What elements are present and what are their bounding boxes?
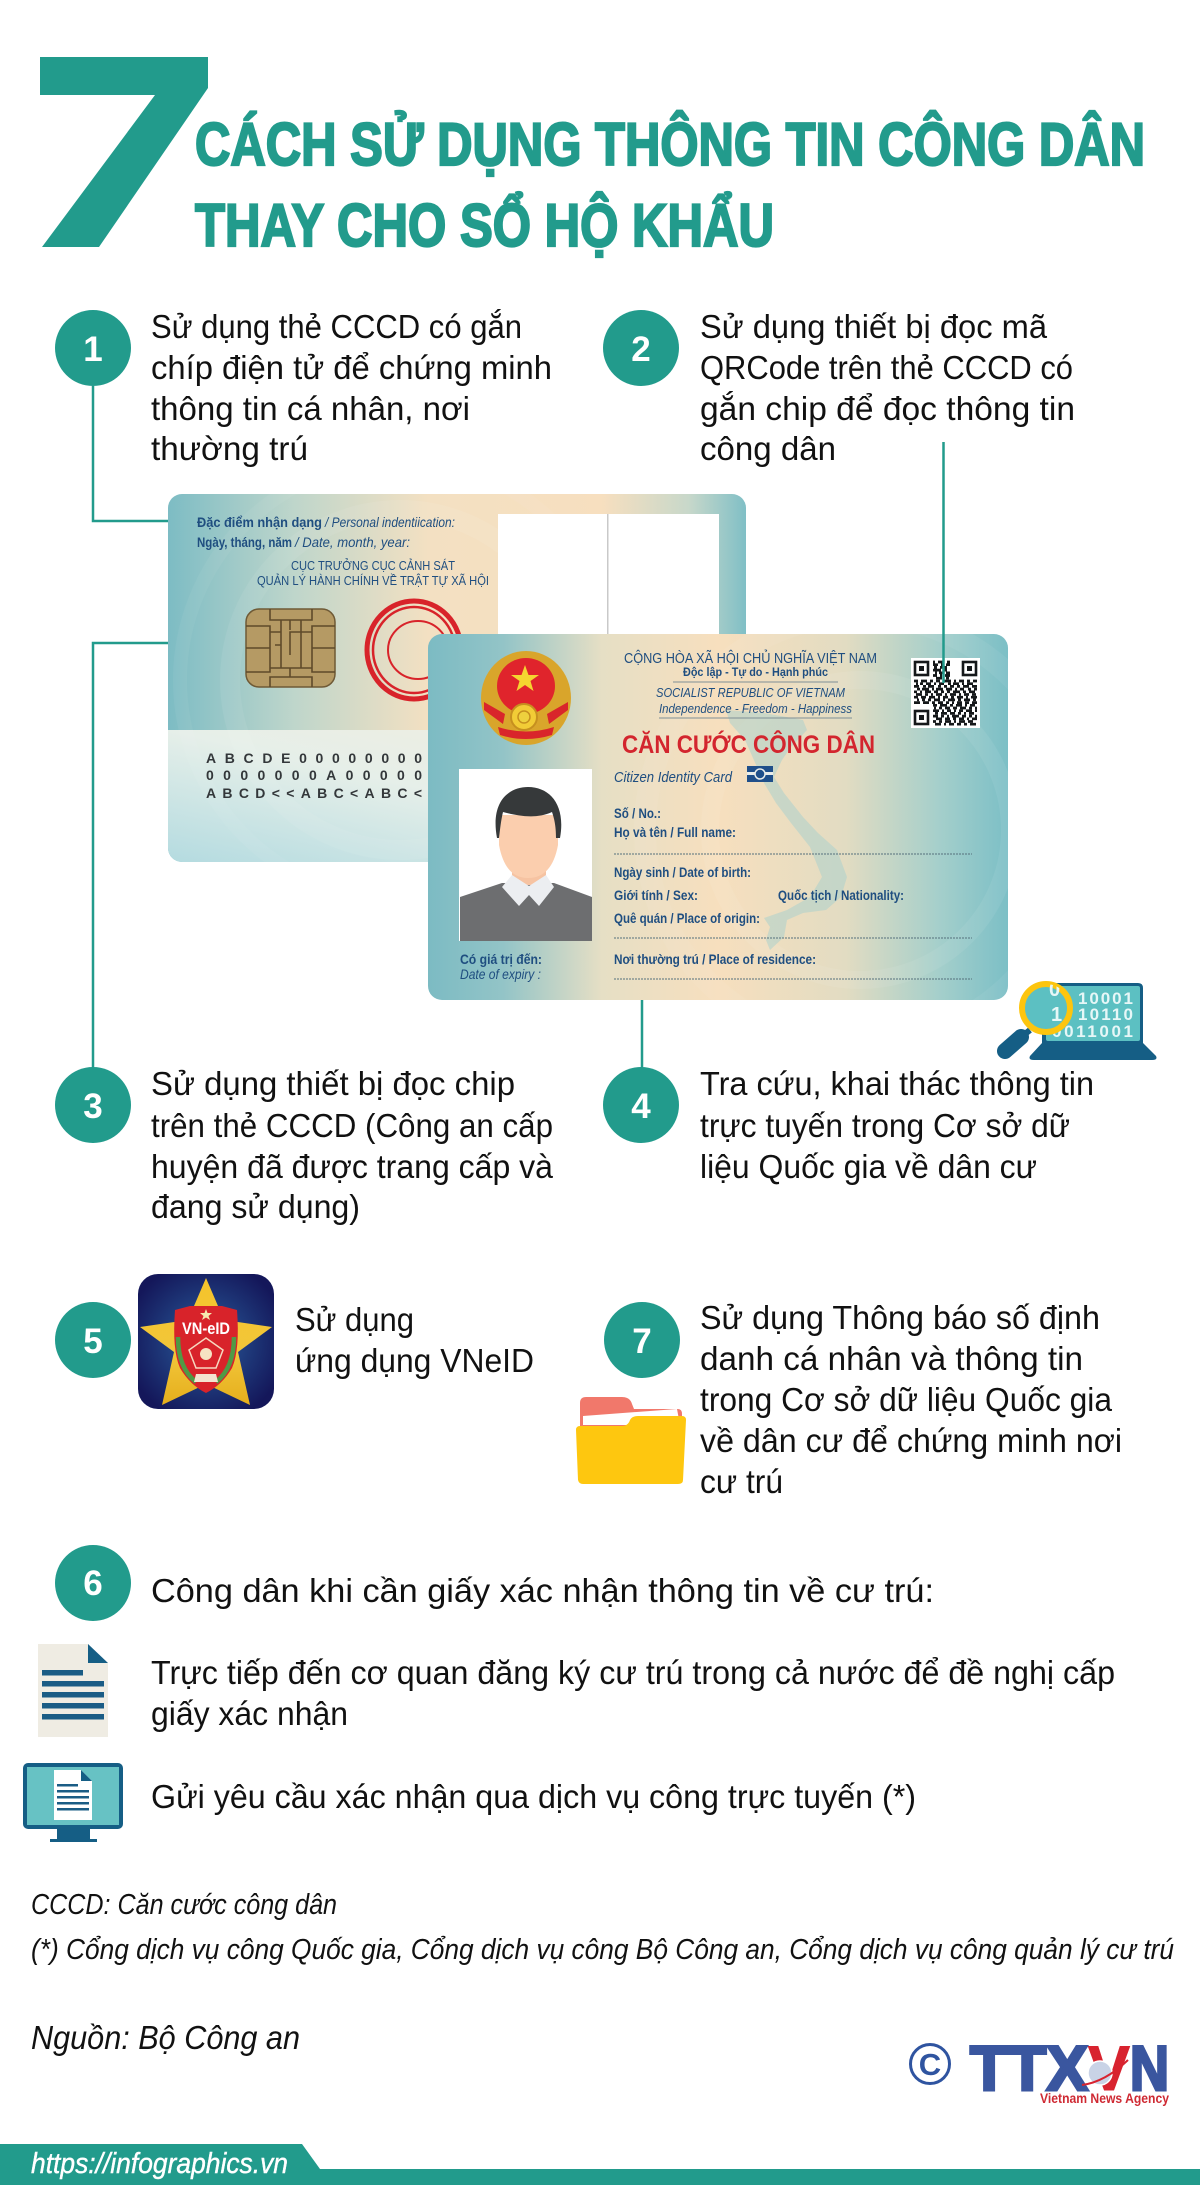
- panel: item 6: [23, 1545, 1115, 1842]
- card fields: Nơi thường trú / Place of residence:: [614, 951, 816, 967]
- machine readable zone: [206, 750, 422, 801]
- card back: / Personal indentiication:: [324, 514, 455, 530]
- card fields: Họ và tên / Full name:: [614, 824, 736, 840]
- panel: item 1: thường trú: [151, 430, 308, 467]
- icon: laptop and magnifier: [1005, 979, 1156, 1060]
- panel: item 7: [604, 1299, 1122, 1500]
- icon: VNeID app: [138, 1274, 274, 1409]
- panel: item 6: Trực tiếp đến cơ quan đăng ký cư trú trong cả nước để đề nghị cấp: [151, 1654, 1115, 1691]
- footnotes: [31, 1889, 1174, 1966]
- panel: item 4: liệu Quốc gia về dân cư: [700, 1148, 1037, 1185]
- panel: item 5: ứng dụng VNeID: [295, 1342, 534, 1379]
- connector lines: [93, 386, 642, 1070]
- logo: TTXVN: TTX: [970, 2034, 1088, 2104]
- icon: VNeID app: VN-eID: [182, 1319, 230, 1338]
- title: THAY CHO SỔ HỘ KHẨU: [195, 192, 774, 259]
- icon: document: [38, 1644, 108, 1737]
- logo: TTXVN: Vietnam News Agency: [1040, 2090, 1169, 2106]
- connector to QR code: [942, 442, 945, 683]
- panel: item 7: về dân cư để chứng minh nơi: [700, 1422, 1122, 1459]
- logo: TTXVN: C: [919, 2047, 941, 2082]
- panel: item 1: thông tin cá nhân, nơi: [151, 390, 470, 427]
- icon: laptop and magnifier: 1: [1051, 1004, 1062, 1026]
- panel: item 6: Gửi yêu cầu xác nhận qua dịch vụ công trực tuyến (*): [151, 1778, 916, 1815]
- icon: laptop and magnifier: 10001: [1078, 989, 1133, 1008]
- panel: item 5: 5: [83, 1322, 103, 1361]
- card fields: Giới tính / Sex:: [614, 887, 698, 903]
- card header text: Independence - Freedom - Happiness: [659, 701, 852, 716]
- panel: item 2: Sử dụng thiết bị đọc mã: [700, 308, 1048, 345]
- panel: item 2: công dân: [700, 430, 836, 467]
- card header text: [624, 649, 877, 716]
- panel: item 3: huyện đã được trang cấp và: [151, 1148, 554, 1185]
- machine readable zone: 0000000A00000: [206, 767, 422, 783]
- card back: Ngày, tháng, năm: [197, 534, 292, 550]
- card back: QUẢN LÝ HÀNH CHÍNH VỀ TRẬT TỰ XÃ HỘI: [257, 573, 489, 588]
- panel: item 3: Sử dụng thiết bị đọc chip: [151, 1065, 515, 1102]
- panel: item 1: chíp điện tử để chứng minh: [151, 349, 552, 386]
- icon: chip: [246, 609, 335, 687]
- panel: item 7: danh cá nhân và thông tin: [700, 1340, 1083, 1377]
- card fields: [460, 769, 972, 982]
- source: Nguồn: Bộ Công an: [31, 2019, 300, 2056]
- portrait photo: [459, 769, 592, 941]
- panel: item 6: Công dân khi cần giấy xác nhận thông tin về cư trú:: [151, 1572, 934, 1609]
- panel: item 4: Tra cứu, khai thác thông tin: [700, 1065, 1094, 1102]
- panel: item 3: trên thẻ CCCD (Công an cấp: [151, 1107, 553, 1144]
- machine readable zone: ABCDE00000000: [206, 750, 422, 766]
- panel: item 7: cư trú: [700, 1463, 783, 1500]
- icon: folder: [576, 1397, 686, 1484]
- logo: TTXVN: [910, 2034, 1169, 2106]
- title: [195, 111, 1145, 259]
- panel: item 6: giấy xác nhận: [151, 1695, 348, 1732]
- panel: item 5: Sử dụng: [295, 1301, 414, 1338]
- icon: monitor with document: [23, 1763, 123, 1842]
- card back: Đặc điểm nhận dạng: [197, 514, 322, 530]
- panel: item 7: 7: [632, 1322, 652, 1361]
- footnotes: CCCD: Căn cước công dân: [31, 1889, 337, 1921]
- panel: item 7: trong Cơ sở dữ liệu Quốc gia: [700, 1381, 1113, 1418]
- panel: item 7: Sử dụng Thông báo số định: [700, 1299, 1100, 1336]
- panel: item 5: [55, 1274, 534, 1409]
- icon: national emblem: [481, 651, 571, 745]
- card fields: Date of expiry :: [460, 966, 541, 982]
- panel: item 3: đang sử dụng): [151, 1188, 360, 1225]
- card back: / Date, month, year:: [294, 534, 410, 550]
- panel: item 1: [55, 308, 552, 467]
- card back: [168, 494, 746, 862]
- panel: item 1: Sử dụng thẻ CCCD có gắn: [151, 308, 522, 345]
- card fields: Quốc tịch / Nationality:: [778, 887, 904, 903]
- card fields: Số / No.:: [614, 805, 661, 821]
- panel: item 6: 6: [83, 1564, 103, 1603]
- machine readable zone: ABCD<<ABC<ABC<: [206, 785, 422, 801]
- panel: item 4: [603, 1065, 1094, 1185]
- footer bar: [0, 2144, 1200, 2185]
- card back: CỤC TRƯỞNG CỤC CẢNH SÁT: [291, 558, 455, 573]
- map of Vietnam: [726, 710, 847, 950]
- card fields: Citizen Identity Card: [614, 769, 733, 786]
- card header text: CỘNG HÒA XÃ HỘI CHỦ NGHĨA VIỆT NAM: [624, 649, 877, 667]
- card header text: Độc lập - Tự do - Hạnh phúc: [683, 665, 828, 679]
- icon: small card symbol: [747, 766, 773, 782]
- panel: item 3: 3: [83, 1087, 103, 1126]
- panel: item 3: [55, 1065, 554, 1225]
- icon: laptop and magnifier: 10110: [1078, 1005, 1133, 1024]
- QR code: [911, 658, 980, 728]
- card header text: SOCIALIST REPUBLIC OF VIETNAM: [656, 685, 845, 700]
- panel: item 2: gắn chip để đọc thông tin: [700, 390, 1075, 427]
- logo: TTXVN: V: [1088, 2034, 1130, 2104]
- panel: item 4: trực tuyến trong Cơ sở dữ: [700, 1107, 1070, 1144]
- card fields: Ngày sinh / Date of birth:: [614, 864, 751, 880]
- footer URL: https://infographics.vn: [31, 2148, 288, 2180]
- card title: CĂN CƯỚC CÔNG DÂN: [622, 729, 875, 759]
- card fields: Có giá trị đến:: [460, 951, 542, 967]
- panel: item 4: 4: [631, 1087, 651, 1126]
- panel: item 1: 1: [83, 330, 103, 369]
- card fields: Quê quán / Place of origin:: [614, 910, 760, 926]
- panel: item 2: QRCode trên thẻ CCCD có: [700, 349, 1073, 386]
- panel: item 2: [603, 308, 1075, 467]
- card front: [428, 634, 1008, 1000]
- icon: red stamp: [367, 601, 461, 699]
- icon: laptop and magnifier: 0: [1049, 979, 1060, 1001]
- logo: TTXVN: N: [1130, 2034, 1169, 2104]
- title: big number 7: [40, 57, 208, 247]
- panel: item 2: 2: [631, 330, 651, 369]
- icon: laptop and magnifier: 0011001: [1052, 1022, 1133, 1041]
